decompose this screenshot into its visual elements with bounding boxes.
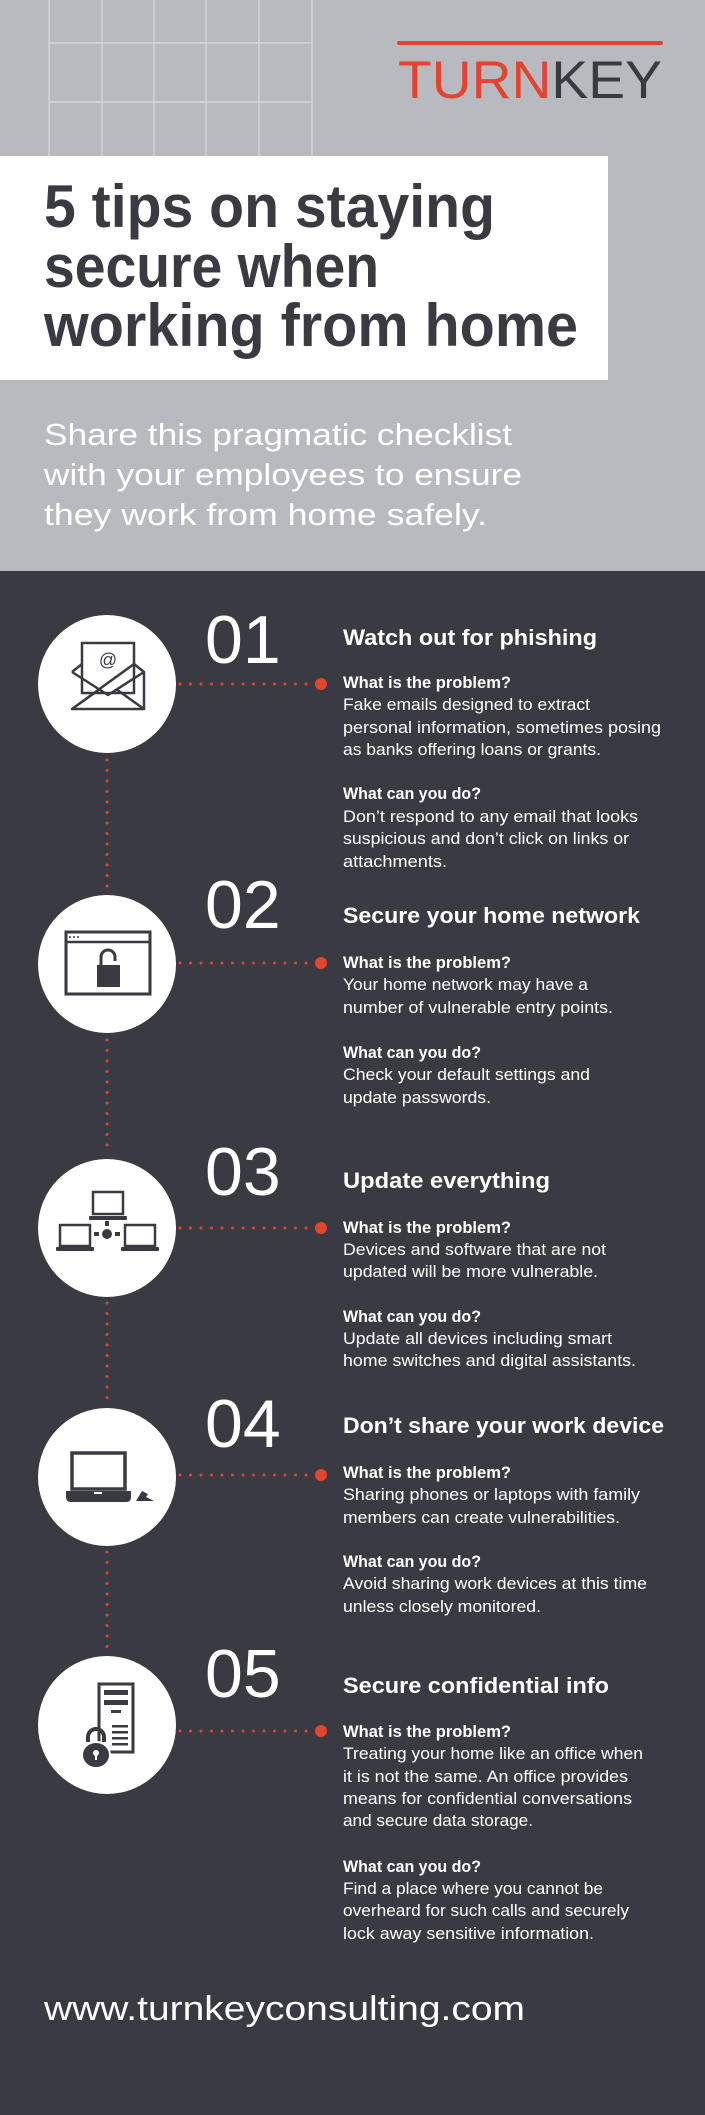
- step 01: phishing: attachments.: [343, 852, 447, 871]
- step 04: work device: [38, 1386, 664, 1616]
- step 04: work device: 04: [205, 1386, 281, 1462]
- timeline connector: [106, 760, 108, 1652]
- step 05: confidential: Treating your home like an office when: [343, 1744, 643, 1763]
- title box: 5 tips on staying: [44, 173, 495, 240]
- step 01: phishing: as banks offering loans or grants.: [343, 740, 601, 759]
- step 05: confidential: lock away sensitive information.: [343, 1924, 594, 1943]
- subtitle: with your employees to ensure: [43, 457, 522, 492]
- icon: laptop: [38, 1408, 176, 1546]
- step 04: work device: Sharing phones or laptops with family: [343, 1485, 641, 1504]
- step 03: update: Update all devices including smart: [343, 1329, 612, 1348]
- step 03: update: 03: [205, 1134, 281, 1210]
- step 04: work device: Don’t share your work device: [343, 1413, 664, 1438]
- step 04: work device: What is the problem?: [343, 1463, 511, 1482]
- step 03: update: home switches and digital assistants.: [343, 1351, 636, 1370]
- icon: envelope: @: [99, 650, 117, 670]
- step 05: confidential: What can you do?: [343, 1857, 481, 1876]
- title box: working from home: [43, 292, 578, 359]
- title box: [0, 156, 608, 380]
- step 01: phishing: Don’t respond to any email that looks: [343, 807, 638, 826]
- step 05: confidential: means for confidential conversations: [343, 1789, 632, 1808]
- subtitle: they work from home safely.: [44, 497, 487, 532]
- step 02: home network: 02: [205, 867, 281, 943]
- step 02: home network: Secure your home network: [343, 903, 641, 928]
- step 02: home network: Check your default settings and: [343, 1065, 590, 1084]
- step 05: confidential: Find a place where you cannot be: [343, 1879, 603, 1898]
- step 01: phishing: Watch out for phishing: [343, 625, 597, 650]
- step 02: home network: Your home network may have a: [343, 975, 589, 994]
- step 02: home network: What can you do?: [343, 1043, 481, 1062]
- step 02: home network: update passwords.: [343, 1088, 491, 1107]
- step 05: confidential: overheard for such calls and securely: [343, 1901, 630, 1920]
- step 05: confidential: it is not the same. An office provides: [343, 1767, 628, 1786]
- step 03: update: [38, 1134, 636, 1370]
- step 05: confidential: What is the problem?: [343, 1722, 511, 1741]
- step 02: home network: number of vulnerable entry points.: [343, 998, 613, 1017]
- step 01: phishing: personal information, sometimes posing: [343, 718, 661, 737]
- step 04: work device: unless closely monitored.: [343, 1597, 541, 1616]
- icon: network of laptops: [38, 1159, 176, 1297]
- step 02: home network: [38, 867, 641, 1107]
- logo: TurnKey: TURNKEY: [398, 51, 662, 110]
- step 03: update: Devices and software that are not: [343, 1240, 606, 1259]
- step 01: phishing: [38, 602, 661, 871]
- icon: browser with padlock: [38, 895, 176, 1033]
- step 03: update: updated will be more vulnerable.: [343, 1262, 598, 1281]
- subtitle: Share this pragmatic checklist: [44, 417, 512, 452]
- footer url: www.turnkeyconsulting.com: [43, 1990, 525, 2028]
- step 05: confidential: Secure confidential info: [343, 1673, 609, 1698]
- icon: server with padlock: [38, 1656, 176, 1794]
- step 01: phishing: Fake emails designed to extract: [343, 695, 590, 714]
- step 05: confidential: and secure data storage.: [343, 1811, 533, 1830]
- step 04: work device: Avoid sharing work devices at this time: [343, 1574, 647, 1593]
- step 01: phishing: What is the problem?: [343, 673, 511, 692]
- icon: envelope: [38, 615, 176, 753]
- step 05: confidential: 05: [205, 1636, 281, 1712]
- title box: secure when: [44, 233, 379, 300]
- step 05: confidential: [38, 1636, 643, 1943]
- subtitle: [43, 417, 522, 532]
- step 01: phishing: suspicious and don’t click on links or: [343, 829, 629, 848]
- step 02: home network: What is the problem?: [343, 953, 511, 972]
- step 01: phishing: What can you do?: [343, 784, 481, 803]
- step 04: work device: members can create vulnerabilities.: [343, 1508, 620, 1527]
- step 01: phishing: 01: [205, 602, 281, 678]
- step 03: update: What can you do?: [343, 1307, 481, 1326]
- step 04: work device: What can you do?: [343, 1552, 481, 1571]
- step 03: update: Update everything: [343, 1168, 550, 1193]
- step 03: update: What is the problem?: [343, 1218, 511, 1237]
